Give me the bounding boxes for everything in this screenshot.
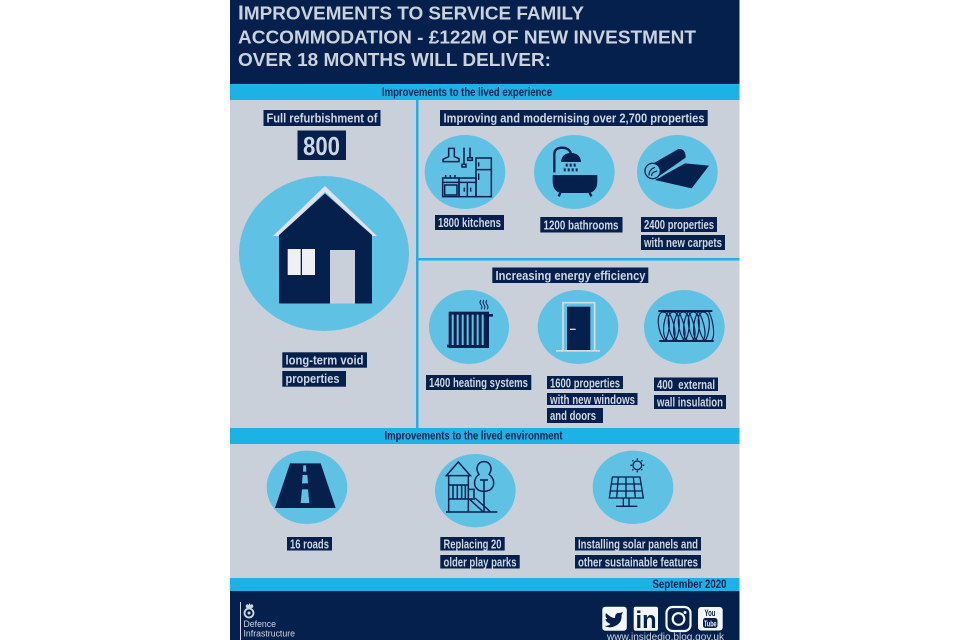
panel: increasing energy efficiency — [426, 268, 726, 423]
icon: bath and shower — [534, 135, 615, 209]
label: installing solar panels and other sustainable features: Installing solar panels and — [578, 538, 698, 552]
label: 1800 kitchens: 1800 kitchens — [438, 216, 501, 230]
label: replacing 20 older play parks: Replacing 20 — [444, 538, 502, 552]
label: 2400 properties with new carpets: 2400 properties — [644, 218, 714, 232]
icon: linkedin: in — [636, 607, 656, 634]
label: 16 roads: 16 roads — [290, 538, 329, 552]
icon: house — [239, 176, 409, 331]
icon: twitter — [602, 607, 627, 631]
logo: Defence Infrastructure: Infrastructure — [244, 629, 295, 640]
heading: improving and modernising: Improving and modernising over 2,700 properties — [444, 112, 705, 126]
label: long-term void properties: properties — [286, 372, 340, 386]
icon: youtube: You — [704, 608, 716, 618]
label: replacing 20 older play parks: older play parks — [444, 556, 517, 570]
title: IMPROVEMENTS TO SERVICE FAMILY — [238, 2, 585, 24]
panel: improving and modernising — [425, 110, 725, 250]
label: 2400 properties with new carpets: with new carpets — [643, 236, 722, 250]
label: long-term void properties: long-term void — [286, 354, 364, 368]
label: 2400 properties with new carpets — [641, 217, 725, 250]
icon: carpet roll — [637, 135, 718, 209]
header: title band — [230, 0, 740, 84]
section: improvements to the lived environment — [230, 428, 740, 578]
icon: play park — [435, 454, 516, 527]
icon: road — [267, 451, 347, 524]
label: replacing 20 older play parks — [440, 537, 520, 570]
date bar: September 2020 — [652, 577, 727, 591]
label: 1400 heating systems: 1400 heating systems — [429, 376, 528, 390]
date bar — [230, 577, 740, 591]
section bar: lived environment: Improvements to the lived environment — [384, 428, 563, 442]
label: 400 external wall insulation — [654, 378, 726, 410]
section: improvements to the lived experience — [230, 84, 740, 428]
icon: kitchen — [425, 135, 505, 209]
heading: full refurbishment of: Full refurbishment of — [266, 112, 378, 126]
title: ACCOMMODATION - £122M OF NEW INVESTMENT — [238, 26, 697, 48]
panel: full refurbishment — [239, 110, 409, 387]
label: 400 external wall insulation: wall insulation — [656, 396, 723, 410]
heading: increasing energy efficiency: Increasing energy efficiency — [496, 269, 646, 283]
number: 800: 800 — [303, 131, 340, 161]
section bar: lived environment — [230, 428, 740, 444]
label: installing solar panels and other sustainable features — [575, 537, 701, 570]
label: long-term void properties — [282, 352, 367, 387]
icon: radiator — [429, 290, 509, 364]
label: 400 external wall insulation: 400 external — [657, 378, 715, 392]
footer — [230, 591, 740, 640]
section bar: lived experience — [230, 84, 740, 100]
label: 1600 properties with new windows and doors: 1600 properties — [550, 376, 620, 390]
label: 1600 properties with new windows and doors: with new windows — [549, 393, 635, 407]
section bar: lived experience: Improvements to the lived experience — [382, 85, 552, 99]
label: 1200 bathrooms: 1200 bathrooms — [544, 218, 619, 232]
label: installing solar panels and other sustainable features: other sustainable features — [578, 556, 698, 570]
icon: wall insulation — [644, 290, 725, 364]
icon: youtube: Tube — [704, 618, 717, 628]
icon: youtube — [698, 607, 723, 630]
logo: Defence Infrastructure — [240, 602, 295, 640]
icon: solar panel — [593, 451, 673, 524]
title: OVER 18 MONTHS WILL DELIVER: — [238, 49, 551, 70]
label: 1600 properties with new windows and doors — [547, 376, 638, 423]
icon: instagram — [666, 607, 690, 631]
title — [238, 2, 697, 70]
logo: Defence Infrastructure: Defence — [244, 619, 276, 630]
icon: door — [538, 290, 618, 364]
label: 1600 properties with new windows and doors: and doors — [550, 409, 596, 423]
